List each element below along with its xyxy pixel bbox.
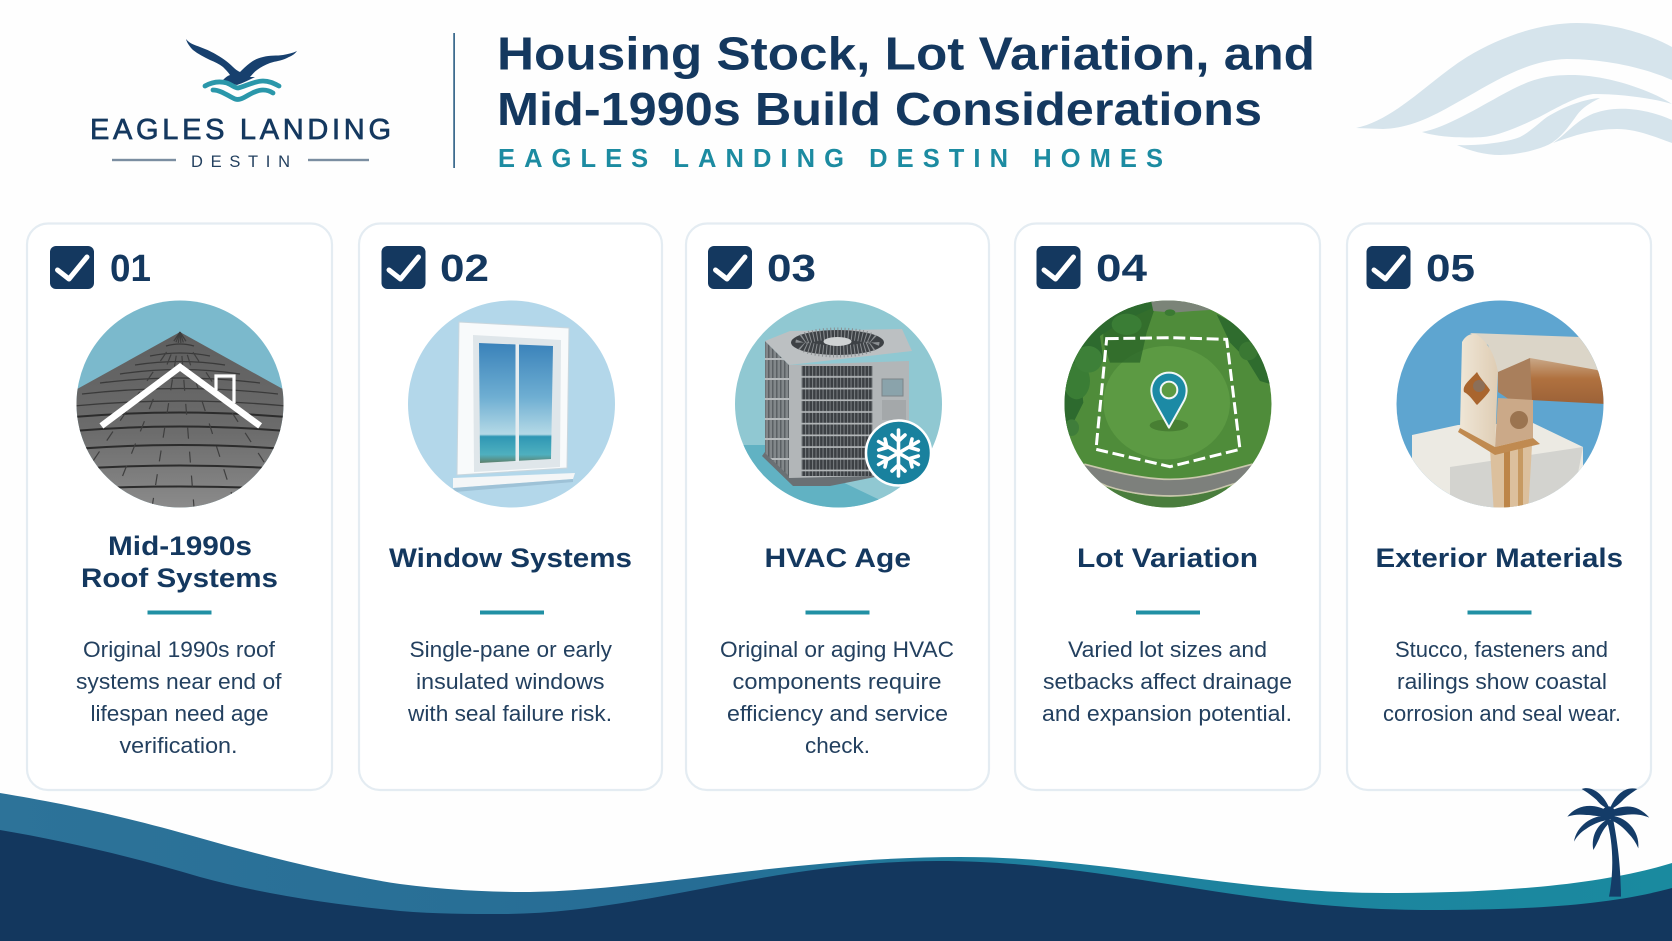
title: [497, 28, 1315, 135]
icon: snowflake badge: [866, 420, 931, 486]
icon: eagle: [186, 39, 297, 85]
card body text: [407, 637, 613, 726]
number 04: 04: [1096, 248, 1147, 290]
card body text: and expansion potential.: [1042, 701, 1292, 726]
image: corroded railing on stucco: [1396, 300, 1604, 508]
subtitle: EAGLES LANDING DESTIN HOMES: [498, 145, 1163, 173]
card body text: systems near end of: [76, 669, 282, 694]
card title: HVAC Age: [764, 543, 911, 573]
footer wave: navy band: [0, 830, 1672, 941]
card body text: Stucco, fasteners and: [1395, 637, 1608, 662]
card body text: [1042, 637, 1292, 726]
decorative waves top right: [1356, 23, 1672, 155]
card body text: Original or aging HVAC: [720, 637, 954, 662]
header divider: [453, 33, 455, 168]
logo sub-wordmark: DESTIN: [191, 153, 290, 171]
card body text: railings show coastal: [1397, 669, 1607, 694]
footer wave: blue-teal band: [0, 793, 1672, 941]
card body text: corrosion and seal wear.: [1383, 701, 1621, 726]
card body text: lifespan need age: [90, 701, 268, 726]
card title: Exterior Materials: [1376, 543, 1623, 573]
icon: checkbox 05: [1366, 246, 1410, 289]
panel: 01 Mid-1990s Roof Systems: [27, 224, 332, 790]
icon: checkbox 04: [1036, 246, 1080, 289]
icon: checkbox 01: [50, 246, 94, 289]
card body text: [76, 637, 282, 758]
panel: 04 Lot Variation: [1015, 224, 1320, 790]
card title: Roof Systems: [81, 563, 278, 593]
icon: water waves: [205, 81, 279, 100]
card title: [81, 531, 278, 593]
panel: 02 Window Systems: [359, 224, 662, 790]
card title: Mid-1990s: [108, 531, 252, 561]
title: Mid-1990s Build Considerations: [497, 83, 1262, 135]
logo wordmark: EAGLES LANDING: [90, 114, 391, 146]
icon: checkbox 03: [708, 246, 752, 289]
card body text: with seal failure risk.: [407, 701, 612, 726]
image: roof shingles with house outline: [76, 300, 284, 508]
number 05: 05: [1426, 248, 1475, 290]
number 01: 01: [110, 248, 151, 290]
number 02: 02: [440, 248, 489, 290]
number 03: 03: [767, 248, 816, 290]
icon: checkbox 02: [382, 246, 426, 289]
card body text: Original 1990s roof: [83, 637, 276, 662]
image: aerial lot with pin: [1060, 296, 1277, 513]
logo: Eagles Landing Destin: [90, 39, 391, 171]
card body text: efficiency and service: [727, 701, 948, 726]
card title: Lot Variation: [1077, 543, 1258, 573]
icon: map pin: [1151, 373, 1187, 428]
card body text: [1383, 637, 1621, 726]
card body text: components require: [732, 669, 942, 694]
card body text: Varied lot sizes and: [1068, 637, 1267, 662]
panel: 03 HVAC Age: [686, 224, 989, 790]
title: Housing Stock, Lot Variation, and: [497, 28, 1315, 80]
card body text: insulated windows: [416, 669, 604, 694]
card body text: setbacks affect drainage: [1043, 669, 1292, 694]
image: window: [408, 300, 615, 508]
image: HVAC condenser: [735, 300, 942, 508]
panel: 05 Exterior Materials: [1347, 224, 1651, 790]
card body text: Single-pane or early: [410, 637, 613, 662]
icon: palm tree: [1567, 788, 1649, 897]
card body text: check.: [805, 733, 870, 758]
card title: Window Systems: [389, 543, 632, 573]
card body text: verification.: [120, 733, 238, 758]
card body text: [720, 637, 954, 758]
